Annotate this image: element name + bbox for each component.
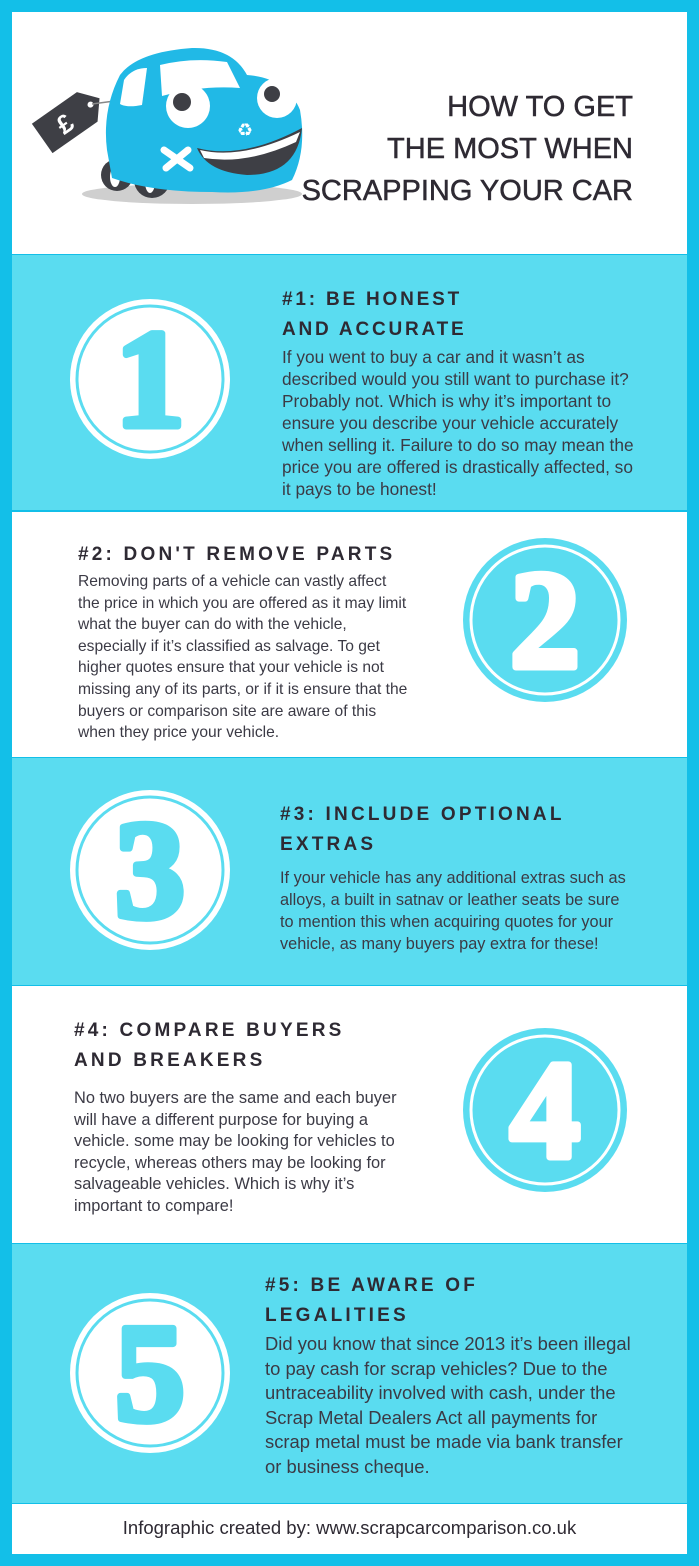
- text 3: vehicle, as many buyers pay extra for these!: [280, 935, 599, 953]
- panel: tip 5: [12, 1244, 687, 1503]
- panel: tip 3: [12, 758, 687, 985]
- panel: tip 2: [12, 512, 687, 757]
- panel: tip 4: [12, 986, 687, 1243]
- number badge 2: 2: [510, 543, 580, 698]
- number badge 5: [70, 1293, 230, 1453]
- text 5: scrap metal must be made via bank transfer: [265, 1431, 623, 1452]
- number badge 2: [463, 538, 627, 702]
- price tag: £: [50, 107, 80, 140]
- text 3: [280, 869, 626, 953]
- number badge 1: [70, 299, 230, 459]
- heading 1: #1: BE HONEST: [282, 289, 462, 310]
- heading 3: EXTRAS: [280, 834, 376, 855]
- number badge 3: 3: [115, 793, 185, 948]
- text 4: will have a different purpose for buying a: [74, 1110, 368, 1128]
- text 1: ensure you describe your vehicle accurately: [282, 413, 618, 433]
- text 2: buyers or comparison site are aware of this: [78, 703, 376, 720]
- text 2: Removing parts of a vehicle can vastly affect: [78, 573, 386, 590]
- heading 5: LEGALITIES: [265, 1305, 409, 1326]
- heading 1: AND ACCURATE: [282, 319, 467, 340]
- text 5: untraceability involved with cash, under the: [265, 1382, 616, 1403]
- text 3: to mention this when acquiring quotes for your: [280, 913, 613, 931]
- number badge 4: 4: [510, 1033, 580, 1188]
- text 5: to pay cash for scrap vehicles? Due to the: [265, 1358, 607, 1378]
- car illustration: ♻: [237, 120, 253, 141]
- text 1: it pays to be honest!: [282, 479, 437, 499]
- text 3: If your vehicle has any additional extras such as: [280, 869, 626, 887]
- text 3: alloys, a built in satnav or leather seats be sure: [280, 891, 619, 909]
- text 1: Probably not. Which is why it’s important to: [282, 391, 611, 411]
- text 4: No two buyers are the same and each buyer: [74, 1089, 397, 1107]
- text 4: [74, 1089, 397, 1214]
- heading 2: #2: DON'T REMOVE PARTS: [78, 544, 395, 565]
- number badge 4: [463, 1028, 627, 1192]
- title: HOW TO GET: [447, 91, 633, 123]
- text 2: higher quotes ensure that your vehicle is not: [78, 659, 384, 676]
- number badge 5: 5: [115, 1296, 185, 1451]
- text 1: [282, 347, 634, 499]
- text 2: the price in which you are offered as it may limit: [78, 595, 406, 612]
- heading 4: AND BREAKERS: [74, 1050, 265, 1071]
- header panel: [12, 12, 687, 254]
- text 5: or business cheque.: [265, 1456, 430, 1476]
- text 2: [78, 573, 407, 741]
- text 2: when they price your vehicle.: [78, 724, 279, 741]
- title: SCRAPPING YOUR CAR: [302, 175, 633, 207]
- number badge 3: [70, 790, 230, 950]
- footer: [12, 1504, 687, 1554]
- text 5: Did you know that since 2013 it’s been illegal: [265, 1333, 631, 1354]
- text 5: [265, 1333, 631, 1477]
- text 4: vehicle. some may be looking for vehicles to: [74, 1132, 395, 1150]
- price tag: [32, 84, 110, 153]
- panel: tip 1: [12, 255, 687, 510]
- text 2: what the buyer can do with the vehicle,: [78, 616, 347, 633]
- title: THE MOST WHEN: [387, 133, 633, 165]
- text 1: price you are offered is drastically affected, so: [282, 457, 633, 477]
- text 4: recycle, whereas others may be looking for: [74, 1154, 386, 1172]
- car illustration: [32, 48, 302, 204]
- text 1: when selling it. Failure to do so may mean the: [282, 435, 634, 455]
- heading 1: [282, 289, 467, 340]
- heading 5: [265, 1275, 478, 1326]
- heading 5: #5: BE AWARE OF: [265, 1275, 478, 1296]
- text 2: missing any of its parts, or if it is ensure that the: [78, 681, 407, 698]
- heading 3: [280, 804, 565, 855]
- footer credit: Infographic created by: www.scrapcarcomparison.co.uk: [123, 1517, 576, 1538]
- heading 4: #4: COMPARE BUYERS: [74, 1020, 345, 1041]
- text 2: especially if it’s classified as salvage. To get: [78, 638, 380, 655]
- heading 3: #3: INCLUDE OPTIONAL: [280, 804, 565, 825]
- text 4: salvageable vehicles. Which is why it’s: [74, 1175, 354, 1193]
- heading 4: [74, 1020, 345, 1071]
- number badge 1: 1: [115, 302, 185, 457]
- text 5: Scrap Metal Dealers Act all payments for: [265, 1406, 597, 1428]
- text 1: If you went to buy a car and it wasn’t as: [282, 347, 585, 367]
- title: [302, 91, 633, 207]
- text 1: described would you still want to purchase it?: [282, 369, 629, 389]
- text 4: important to compare!: [74, 1196, 233, 1214]
